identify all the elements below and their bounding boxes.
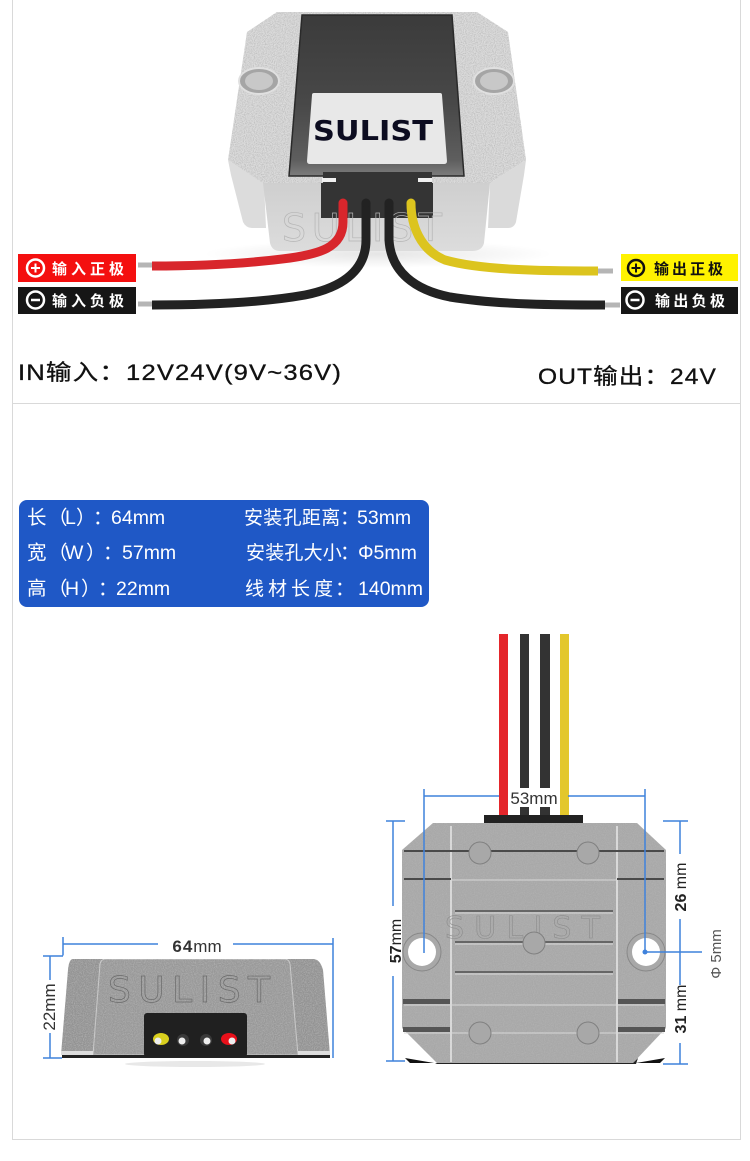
31mm: 31 mm bbox=[673, 985, 690, 1033]
black wire right bbox=[389, 203, 605, 305]
spec: wire length: 线材长度 bbox=[245, 578, 337, 600]
spec: length: （ bbox=[48, 507, 68, 529]
spec: width: ： bbox=[103, 542, 123, 564]
product photo: converter with wires bbox=[138, 12, 620, 305]
yellow wire bbox=[411, 203, 598, 271]
label: input negative bbox=[18, 287, 136, 314]
connector block bbox=[321, 172, 433, 218]
mounting holes bbox=[403, 933, 665, 971]
label: output negative: 输出负极 bbox=[655, 292, 725, 310]
mounting holes bbox=[239, 68, 514, 94]
red wire bbox=[152, 203, 343, 266]
spec: width: W bbox=[65, 542, 84, 564]
watermark: SULIST bbox=[445, 911, 601, 946]
spec: length: ： bbox=[93, 507, 113, 529]
connector bbox=[144, 1013, 247, 1057]
four wires bbox=[499, 634, 569, 816]
spec: width: ） bbox=[86, 542, 106, 564]
spec: hole size: Φ5mm bbox=[358, 542, 417, 564]
spec: hole distance: ： bbox=[340, 507, 360, 529]
spec: wire length: 140mm bbox=[358, 578, 423, 600]
spec: hole distance: 53mm bbox=[357, 507, 411, 529]
white nameplate bbox=[307, 93, 447, 164]
spec: hole distance: 安装孔距离 bbox=[244, 507, 341, 529]
watermark: SULIST bbox=[282, 206, 443, 250]
spec: width: 宽 bbox=[27, 542, 47, 564]
spec: length: ） bbox=[76, 507, 96, 529]
label: input negative: 输入负极 bbox=[52, 292, 124, 310]
label: output positive: 输出正极 bbox=[654, 260, 723, 278]
64mm: 64mm bbox=[172, 937, 222, 956]
spec: hole size: 安装孔大小 bbox=[246, 542, 342, 564]
white nameplate: SULIST bbox=[313, 114, 433, 147]
spec: height: ： bbox=[98, 578, 118, 600]
26mm: 26 mm bbox=[673, 863, 690, 911]
label: input positive: 输入正极 bbox=[52, 260, 124, 278]
label: input positive bbox=[18, 254, 136, 282]
top face bbox=[228, 12, 526, 183]
pins bbox=[153, 1033, 237, 1046]
module body bbox=[402, 823, 666, 1063]
spec: height: （ bbox=[48, 578, 68, 600]
53mm: 53mm bbox=[510, 789, 558, 808]
22mm: 22mm bbox=[40, 983, 59, 1031]
spec: wire length: ： bbox=[335, 578, 355, 600]
watermark: SULIST bbox=[108, 970, 271, 1011]
label: output negative bbox=[621, 287, 738, 314]
spec: height: 高 bbox=[27, 578, 47, 600]
front view diagram bbox=[40, 937, 333, 1067]
wire leads bbox=[138, 265, 620, 305]
rivets bbox=[469, 842, 599, 1044]
black wire left bbox=[152, 203, 366, 305]
black window bbox=[289, 15, 464, 176]
dimension lines bbox=[386, 789, 702, 1064]
spec: length: L bbox=[65, 507, 76, 529]
spec: height: H bbox=[65, 578, 79, 600]
57mm: 57mm bbox=[388, 919, 405, 963]
module front bbox=[61, 959, 330, 1055]
output voltage text: OUT输出：24V bbox=[538, 364, 717, 389]
spec: height: ） bbox=[81, 578, 101, 600]
side walls bbox=[228, 160, 266, 228]
spec: hole size: ： bbox=[340, 542, 360, 564]
spec panel bbox=[19, 500, 429, 607]
spec: length: 长 bbox=[27, 507, 47, 529]
spec: width: 57mm bbox=[122, 542, 176, 564]
top view diagram bbox=[386, 634, 725, 1064]
input voltage text: IN输入：12V24V(9V~36V) bbox=[18, 360, 342, 385]
label: output positive bbox=[621, 254, 738, 281]
spec: height: 22mm bbox=[116, 578, 170, 600]
spec: length: 64mm bbox=[111, 507, 165, 529]
dimension lines bbox=[43, 937, 333, 1058]
phi 5mm: Φ 5mm bbox=[708, 929, 725, 979]
front wall bbox=[263, 183, 490, 251]
spec: width: （ bbox=[48, 542, 68, 564]
